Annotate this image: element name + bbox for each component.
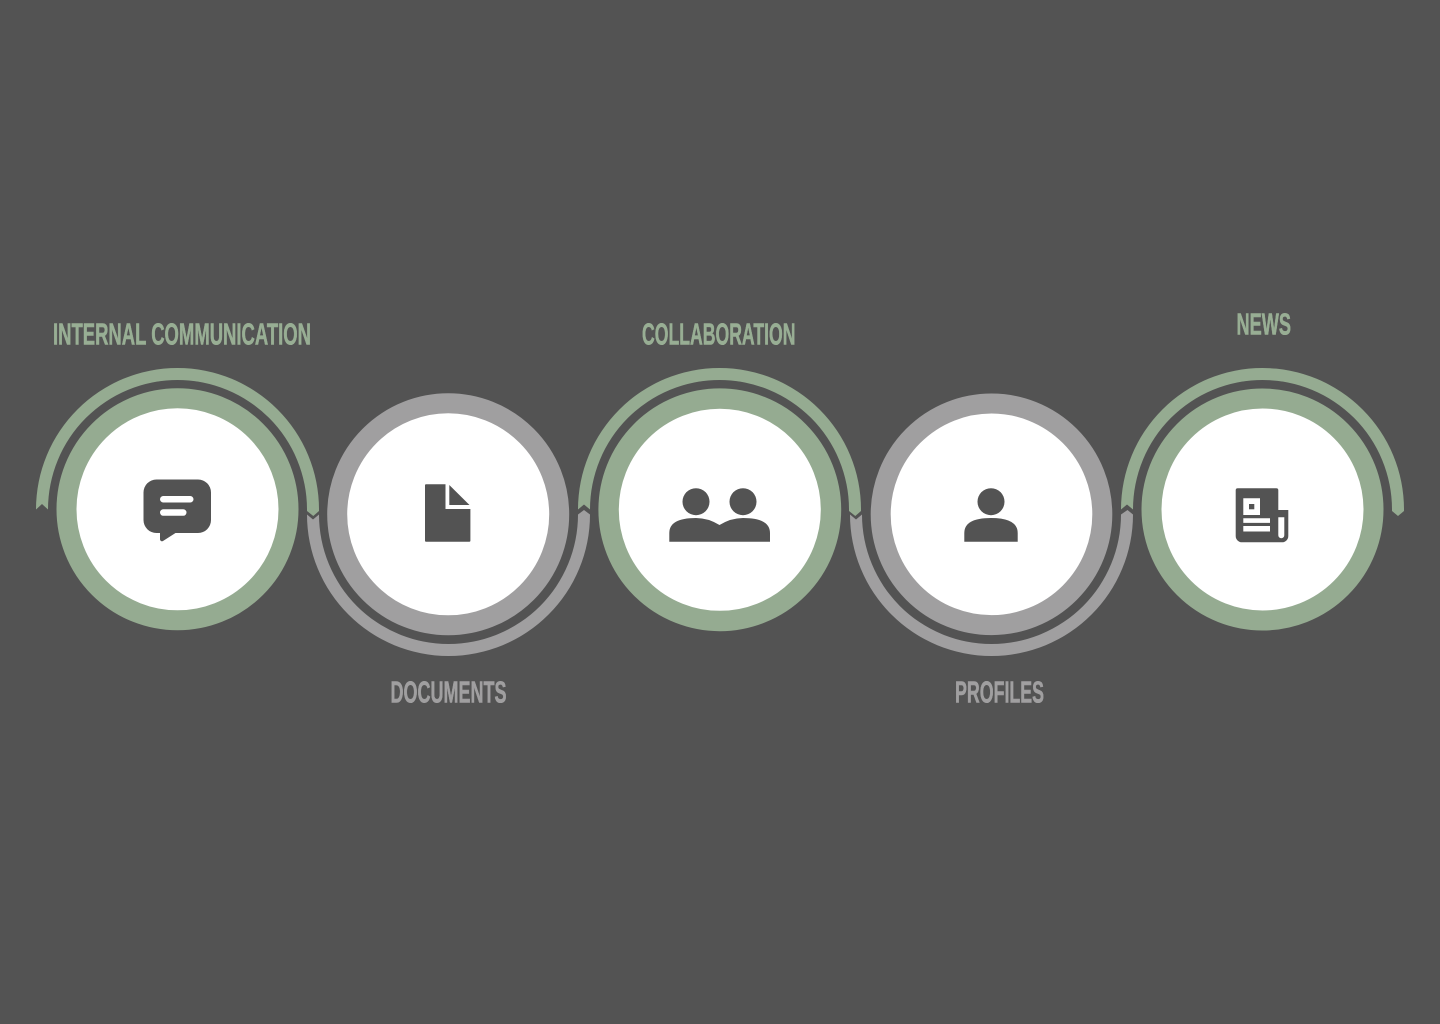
step: news <box>1121 306 1404 620</box>
step: documents <box>307 403 590 710</box>
label: internal communication: INTERNAL COMMUNICATION <box>53 316 311 351</box>
arc: grey bottom arc <box>850 510 1133 656</box>
icon: two people <box>669 488 770 542</box>
step: profiles <box>850 404 1133 710</box>
ring: green circle <box>1152 398 1374 620</box>
label: news: NEWS <box>1236 306 1291 342</box>
step: collaboration <box>578 316 861 621</box>
ring: grey circle <box>337 403 559 625</box>
icon: document <box>425 484 470 542</box>
step: internal communication <box>36 316 319 620</box>
arc: green top arc <box>1121 368 1404 516</box>
label: collaboration: COLLABORATION <box>642 316 796 351</box>
ring: green circle <box>66 398 288 620</box>
ring: grey circle <box>881 404 1102 625</box>
icon: person <box>964 488 1018 542</box>
icon: newspaper <box>1236 488 1288 542</box>
label: profiles: PROFILES <box>955 674 1044 710</box>
arc: green top arc <box>36 368 319 516</box>
icon: chat bubble <box>144 480 211 541</box>
ring: green circle <box>609 399 831 621</box>
arc: green top arc <box>578 368 861 516</box>
arc: grey bottom arc <box>307 510 590 656</box>
label: documents: DOCUMENTS <box>390 674 506 710</box>
